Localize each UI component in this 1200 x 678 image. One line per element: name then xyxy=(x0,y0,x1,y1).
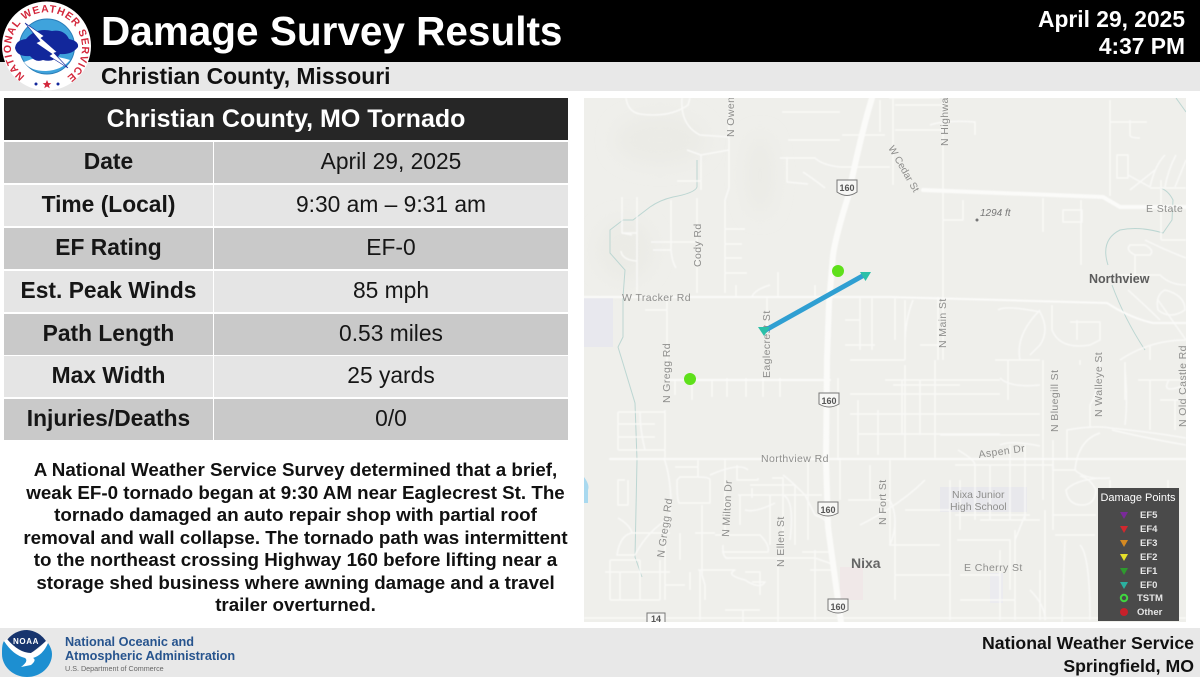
map labels: Eaglecrest St xyxy=(761,310,773,378)
elevation label: 1294 ft xyxy=(980,208,1012,219)
row: path length: Path Length xyxy=(43,320,174,346)
row: EF rating xyxy=(4,228,568,269)
map labels: Aspen Dr xyxy=(978,443,1026,461)
map labels: W Cedar St xyxy=(885,144,921,194)
elevation label xyxy=(976,208,1012,222)
survey summary text: storage shed business where awning damage and a travel xyxy=(36,572,555,592)
legend: damage points: EF3 xyxy=(1140,538,1157,549)
land use patches xyxy=(584,298,1027,603)
row: date: April 29, 2025 xyxy=(321,148,461,174)
map labels: N Main St xyxy=(937,298,949,348)
highway shields: 160 xyxy=(820,505,836,515)
map labels xyxy=(622,91,1189,574)
survey summary text: weak EF-0 tornado began at 9:30 AM near Eaglecrest St. The xyxy=(26,482,565,502)
survey summary text: to the northeast crossing Highway 160 before lifting near a xyxy=(34,549,557,570)
row: injuries and deaths: Injuries/Deaths xyxy=(27,404,190,430)
row: path length xyxy=(4,314,568,355)
place labels: Nixa xyxy=(851,555,881,571)
office name: National Weather Service xyxy=(982,633,1194,653)
damage point: south xyxy=(684,373,696,385)
survey summary text: removal and wall collapse. The tornado path was intermittent xyxy=(23,526,568,548)
highway shields: 160 xyxy=(830,602,846,612)
place labels: Northview xyxy=(1089,272,1150,286)
legend: damage points: TSTM xyxy=(1137,593,1163,604)
main roads xyxy=(584,98,1186,622)
legend: damage points: EF4 xyxy=(1140,524,1158,535)
row: injuries and deaths xyxy=(4,399,568,440)
row: date xyxy=(4,142,568,183)
legend: damage points: EF1 xyxy=(1140,566,1158,577)
NOAA name: Atmospheric Administration xyxy=(65,649,235,663)
date and time: 4:37 PM xyxy=(1099,33,1185,59)
title: Damage Survey Results xyxy=(101,8,562,54)
row: time: 9:30 am – 9:31 am xyxy=(296,190,486,216)
survey summary text: trailer overturned. xyxy=(215,594,376,615)
map labels: High School xyxy=(950,501,1007,513)
legend: damage points: Other xyxy=(1137,607,1163,618)
row: peak winds: Est. Peak Winds xyxy=(21,276,196,302)
date and time xyxy=(1038,6,1185,59)
row: path length: 0.53 miles xyxy=(339,320,443,346)
icon: NOAA logo: NOAA xyxy=(13,637,39,646)
panel: tornado facts table xyxy=(4,98,568,440)
table heading xyxy=(4,98,568,140)
row: EF rating: EF Rating xyxy=(55,234,162,260)
row: max width: Max Width xyxy=(52,362,165,388)
office name xyxy=(982,633,1194,676)
map labels: Nixa Junior xyxy=(952,489,1005,501)
row: peak winds xyxy=(4,271,568,312)
map labels: N Fort St xyxy=(877,479,889,525)
table heading: Christian County, MO Tornado xyxy=(107,104,465,132)
subtitle bar xyxy=(0,62,1200,91)
map labels: Northview Rd xyxy=(761,453,829,465)
survey summary text xyxy=(23,459,568,615)
department of commerce: U.S. Department of Commerce xyxy=(65,664,164,673)
panel: damage map xyxy=(584,98,1186,622)
highway shields xyxy=(647,180,857,624)
row: max width: 25 yards xyxy=(347,362,435,388)
terrain shading xyxy=(597,115,774,280)
map labels: N Milton Dr xyxy=(720,480,735,537)
map labels: N Bluegill St xyxy=(1049,370,1061,432)
survey summary text: A National Weather Service Survey determined that a brief, xyxy=(34,459,557,480)
date and time: April 29, 2025 xyxy=(1038,6,1185,32)
footer bar xyxy=(0,628,1200,677)
header bar xyxy=(0,0,1200,62)
legend: damage points: EF5 xyxy=(1140,510,1158,521)
icon: NOAA logo xyxy=(2,630,52,677)
map labels: N Gregg Rd xyxy=(655,497,675,558)
legend: damage points: EF0 xyxy=(1140,580,1157,591)
streams xyxy=(610,98,1186,577)
NOAA name: National Oceanic and xyxy=(65,635,194,649)
highway shields: 160 xyxy=(821,396,837,406)
row: date: Date xyxy=(84,148,133,174)
legend: damage points: EF2 xyxy=(1140,552,1157,563)
highway shields: 160 xyxy=(839,183,855,193)
map labels: N Ellen St xyxy=(775,516,787,567)
map labels: W Tracker Rd xyxy=(622,292,691,304)
icon: National Weather Service logo: NATIONAL WEATHER SERVICE xyxy=(4,5,90,82)
office name: Springfield, MO xyxy=(1063,656,1194,676)
map labels: Cody Rd xyxy=(692,223,704,267)
NOAA name xyxy=(65,635,235,663)
subtitle: Christian County, Missouri xyxy=(101,63,391,89)
survey summary text: tornado damaged an auto repair shop with partial roof xyxy=(54,504,537,525)
damage point: north xyxy=(832,265,844,277)
tornado track arrow xyxy=(758,272,871,336)
row: EF rating: EF-0 xyxy=(366,234,416,260)
row: time xyxy=(4,185,568,226)
map labels: E State xyxy=(1146,203,1183,215)
legend: damage points xyxy=(1098,488,1179,621)
row: injuries and deaths: 0/0 xyxy=(375,404,407,430)
legend: damage points: Damage Points xyxy=(1100,492,1176,504)
map labels: N Gregg Rd xyxy=(661,343,673,403)
local streets xyxy=(584,98,1186,622)
place labels xyxy=(851,272,1150,571)
row: time: Time (Local) xyxy=(42,190,175,216)
map labels: N Walleye St xyxy=(1093,352,1105,417)
row: peak winds: 85 mph xyxy=(353,276,429,302)
row: max width xyxy=(4,356,568,397)
lake xyxy=(584,477,588,503)
map labels: E Cherry St xyxy=(964,562,1023,574)
